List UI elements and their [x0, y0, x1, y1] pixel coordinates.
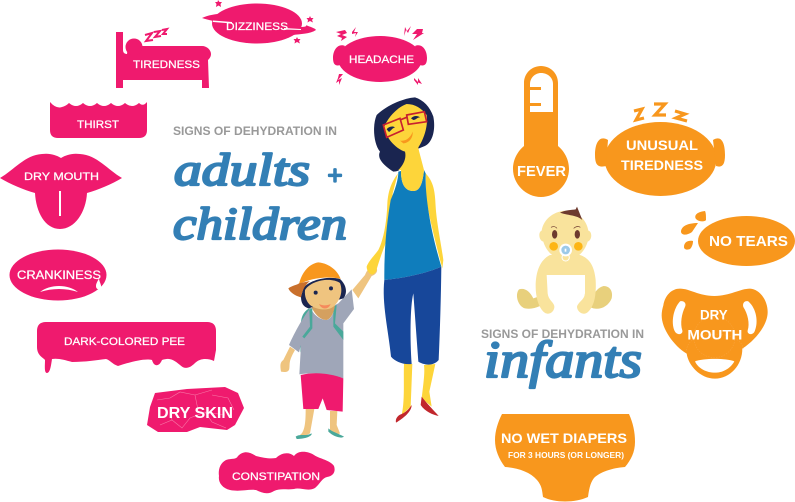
label: dark-colored pee: DARK-COLORED PEE — [64, 336, 185, 348]
panel: headache — [333, 26, 427, 85]
label: dizziness: DIZZINESS — [226, 21, 288, 33]
label: thirst: THIRST — [77, 119, 119, 131]
label: constipation: CONSTIPATION — [232, 471, 320, 483]
heading script: infants: infants — [484, 332, 642, 389]
panel: crankiness — [10, 250, 106, 300]
heading: signs in infants: SIGNS OF DEHYDRATION IN — [481, 327, 644, 341]
label: dry mouth: DRY MOUTH — [24, 171, 99, 183]
label: for 3 hours: FOR 3 HOURS (OR LONGER) — [508, 451, 624, 460]
panel: dark-colored pee — [37, 322, 216, 373]
panel: thirst — [50, 102, 147, 138]
panel: no tears — [681, 211, 795, 266]
panel: tiredness bed — [116, 29, 211, 88]
heading script: children: children — [173, 198, 347, 249]
label: crankiness: CRANKINESS — [17, 268, 101, 282]
panel: constipation — [219, 452, 335, 493]
label: tiredness: TIREDNESS — [133, 59, 200, 71]
panel: unusual tiredness — [595, 104, 725, 196]
label: fever: FEVER — [517, 163, 566, 180]
panel: dry mouth pacifier — [662, 289, 768, 379]
panel: dry mouth — [0, 154, 122, 229]
label: no wet diapers: NO WET DIAPERS — [501, 430, 627, 446]
label: dry mouth: DRY — [700, 306, 728, 322]
label: dry skin: DRY SKIN — [157, 405, 233, 422]
panel: dizziness — [202, 0, 316, 44]
illustration: child — [280, 262, 377, 439]
heading script: adults +: + — [326, 161, 344, 190]
label: no tears: NO TEARS — [709, 233, 788, 250]
illustration: baby — [517, 207, 612, 314]
label: unusual tiredness: TIREDNESS — [621, 157, 703, 173]
illustration: woman — [367, 97, 443, 423]
panel: no wet diapers — [495, 414, 635, 502]
label: unusual tiredness: UNUSUAL — [626, 137, 698, 153]
icon: thermometer fever — [513, 66, 569, 197]
heading: signs in adults and children: SIGNS OF DEHYDRATION IN — [173, 124, 337, 138]
panel: dry skin — [147, 387, 244, 432]
label: headache: HEADACHE — [349, 54, 414, 66]
heading script: adults +: adults — [174, 144, 310, 195]
label: dry mouth: MOUTH — [687, 326, 742, 342]
